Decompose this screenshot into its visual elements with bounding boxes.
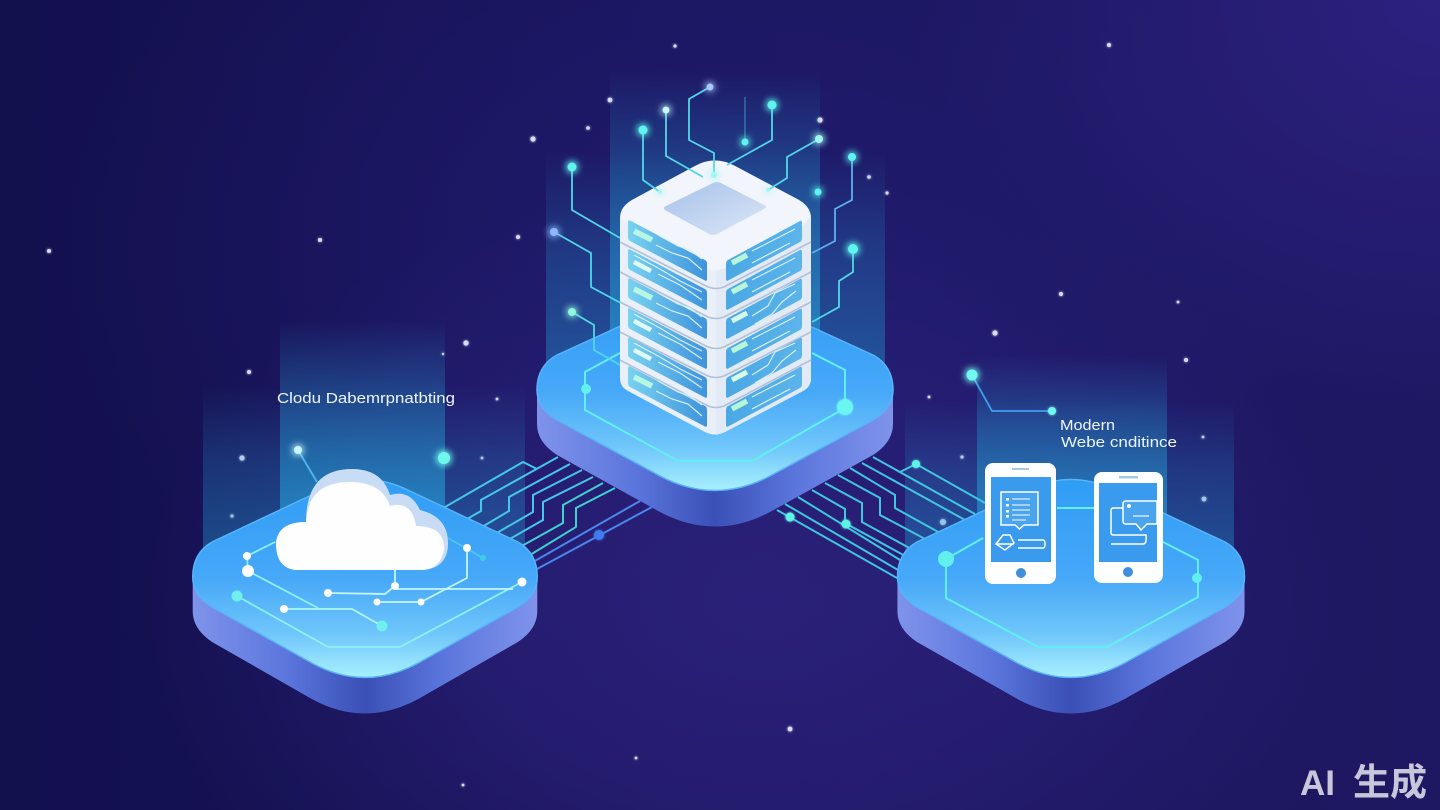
label: phones: Webe cnditince [1061,435,1177,451]
connection traces: cloud to server [427,457,652,569]
phones upper wire [966,370,1056,415]
server side wires [554,97,853,365]
server layer dividers [620,242,811,408]
icon: phone left [985,463,1056,584]
label: phones [1060,418,1177,451]
label: phones: Modern [1060,418,1115,434]
watermark: 生成 [1353,762,1427,803]
label: cloud: Clodu Dabemrpnatbting [277,390,455,407]
connection traces: server to phones [777,457,985,578]
phones platform circuit [938,508,1202,647]
stars [47,43,1206,786]
server panels [628,220,802,427]
panel: cloud platform [193,480,537,714]
light columns [203,70,1234,580]
panel: phones platform [897,480,1245,714]
cloud platform circuit [232,538,526,647]
cloud wires [294,446,450,482]
server wire nodes [550,84,858,316]
server top wires [643,87,819,192]
icon: cloud [276,469,448,570]
server tower [620,160,811,435]
server platform circuit [581,353,853,461]
icon: phone right [1094,472,1163,583]
panel: server platform [537,292,893,526]
watermark: AI [1300,764,1335,803]
